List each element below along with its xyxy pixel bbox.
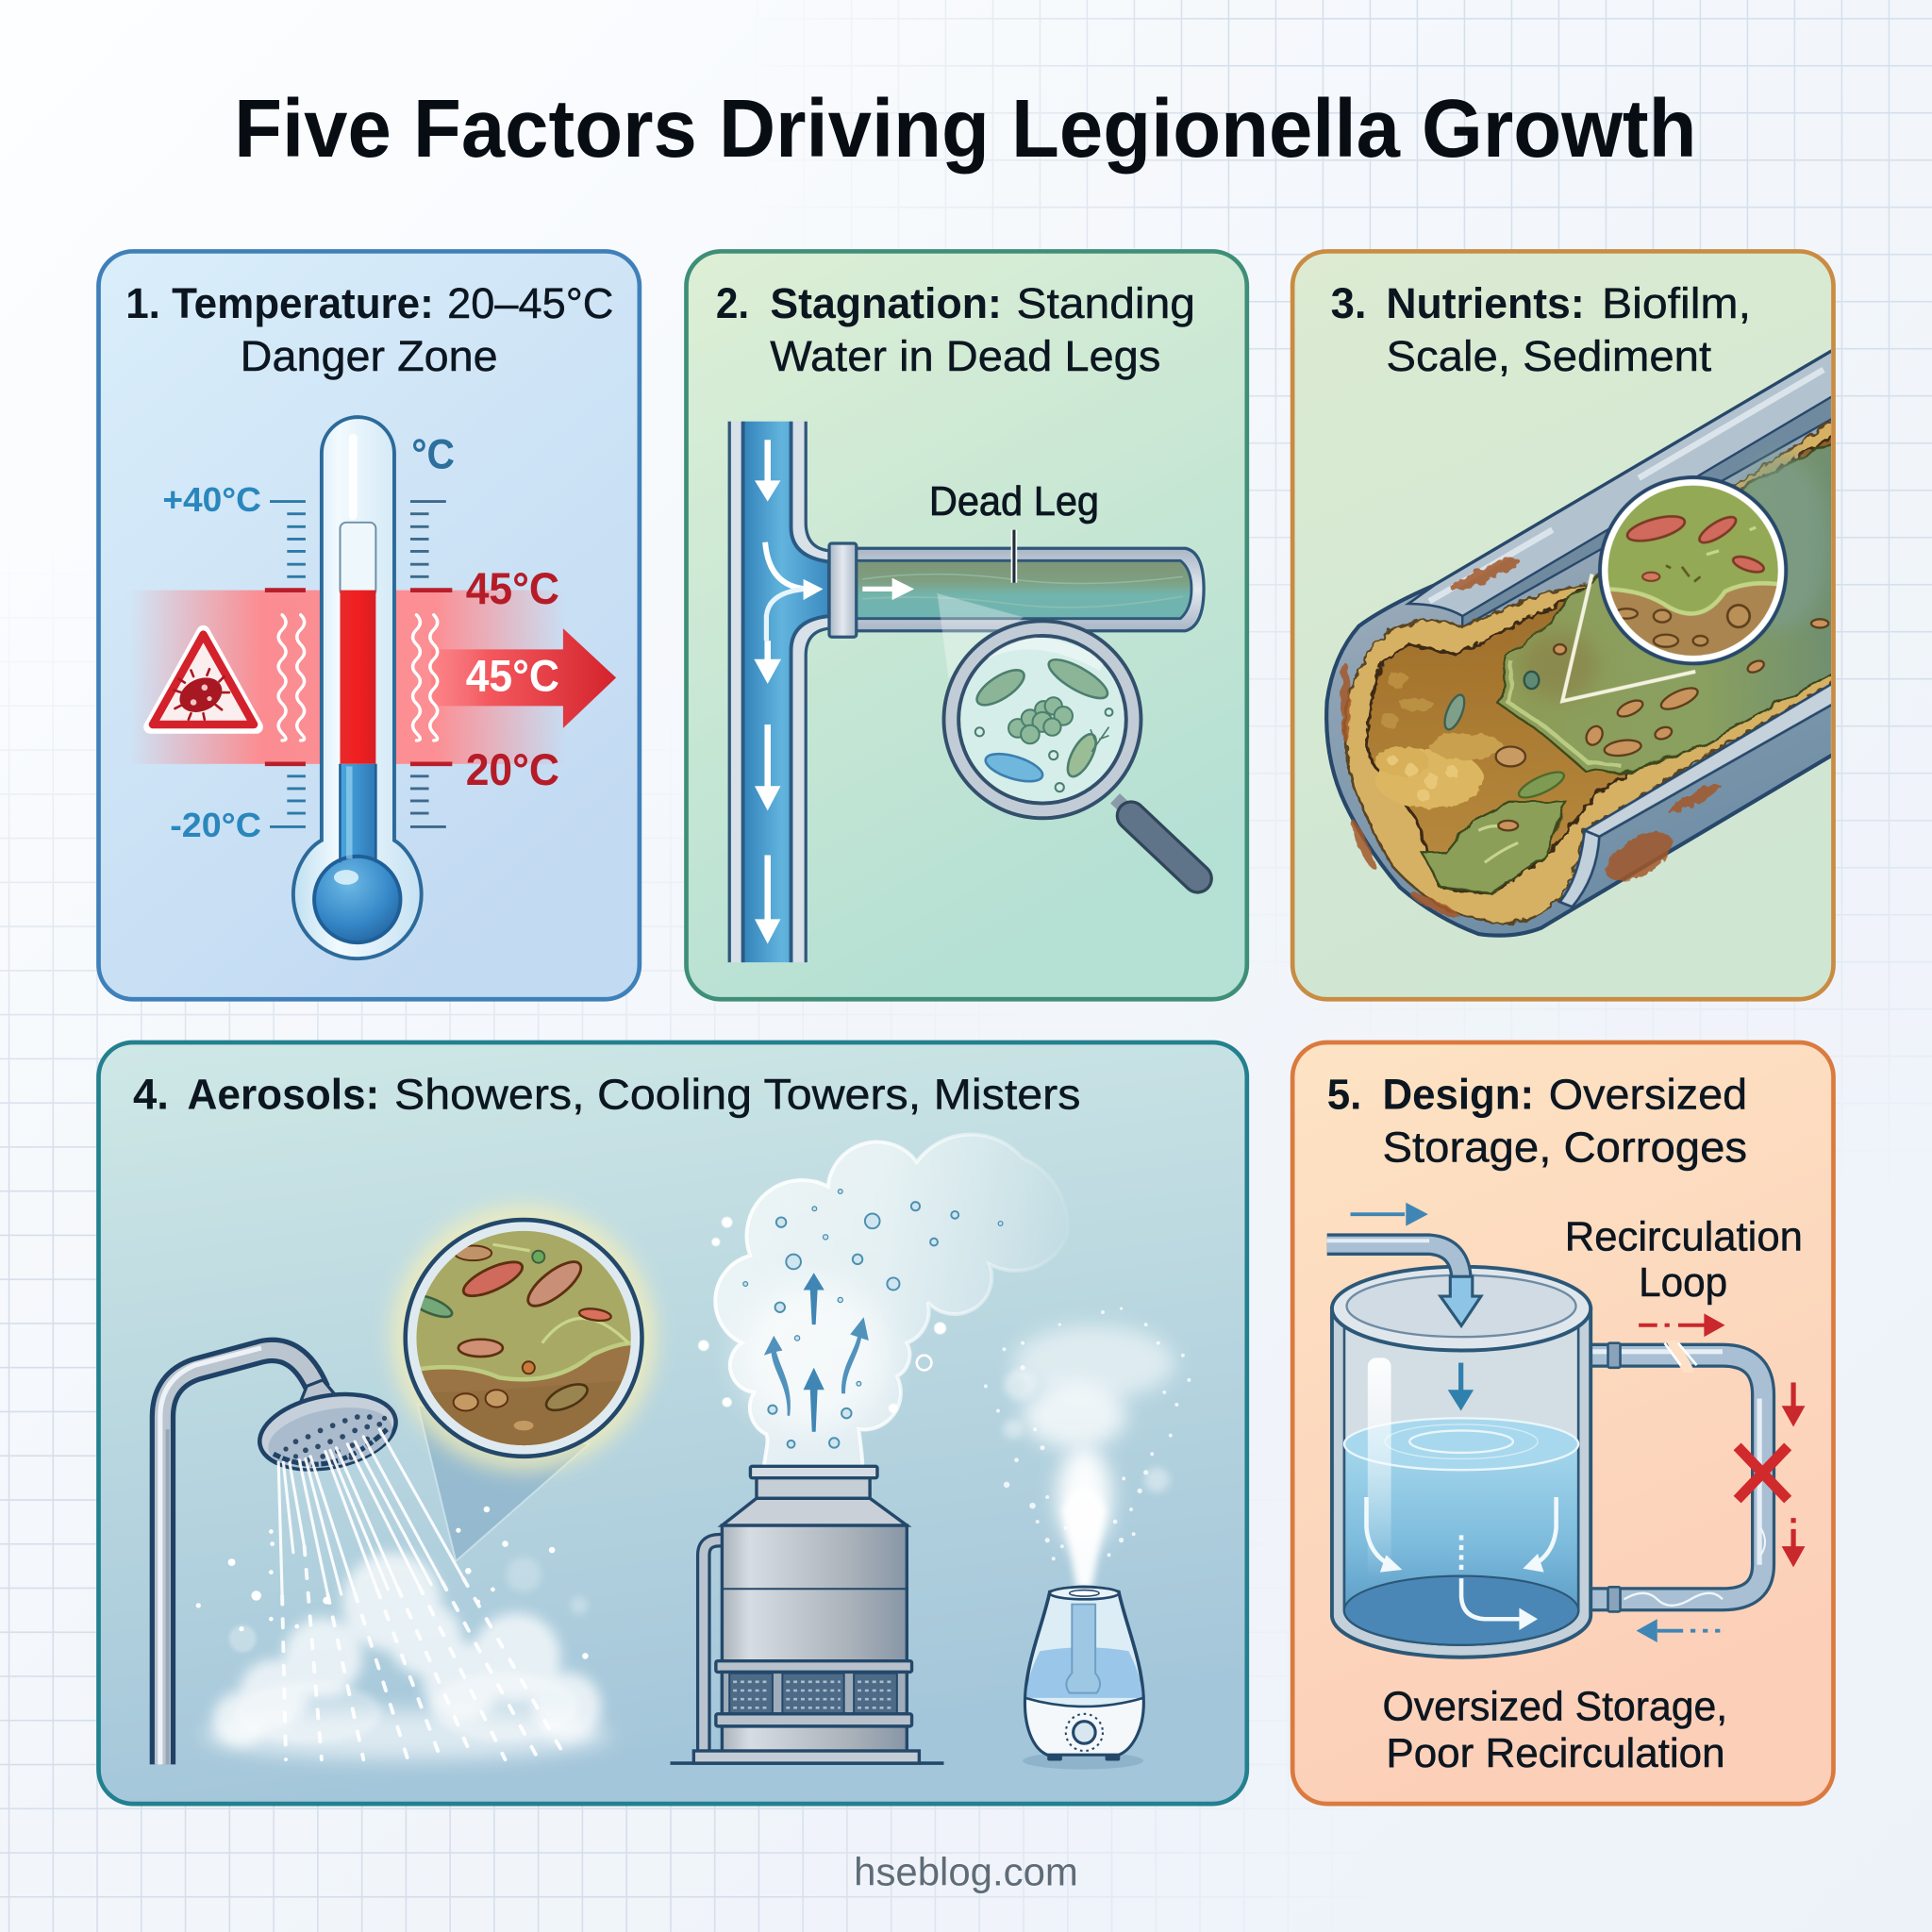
heading: stagnation: Water in Dead Legs	[770, 332, 1160, 380]
label: recirculation loop: Recirculation	[1565, 1215, 1803, 1260]
mist droplets	[196, 1507, 589, 1659]
heading: design: Design:	[1382, 1071, 1534, 1119]
tank rim	[1332, 1267, 1591, 1351]
heading: nutrients: Scale, Sediment	[1386, 332, 1712, 380]
magnifier cone lines	[1562, 575, 1695, 701]
magnifier cone	[418, 1405, 589, 1561]
humidifier	[1023, 1587, 1143, 1770]
main vertical pipe	[729, 407, 829, 979]
heading: aerosols: Aerosols:	[188, 1071, 379, 1119]
danger zone band	[129, 591, 567, 764]
pipe upper wall	[1408, 349, 1836, 627]
arrow: 45°C	[431, 628, 616, 728]
pipe shell	[1326, 349, 1836, 936]
pipe flange	[829, 543, 857, 637]
storage tank	[1332, 1267, 1591, 1657]
arrow: 45°C: 45°C	[466, 651, 559, 701]
heat wave lines	[278, 615, 438, 741]
caption: oversized storage: Oversized Storage,	[1382, 1684, 1727, 1729]
heading: temperature: Danger Zone	[241, 332, 498, 380]
magnified bacteria circle	[391, 1205, 657, 1472]
stored water	[1344, 1418, 1578, 1645]
caption: oversized storage: Poor Recirculation	[1386, 1731, 1725, 1776]
heading: stagnation: Stagnation:	[770, 279, 1002, 327]
scale labels: +40°C	[162, 480, 261, 519]
heading: design: Oversized	[1549, 1071, 1747, 1119]
flow arrows	[754, 440, 914, 943]
scale labels: 20°C	[466, 744, 559, 794]
magnified biofilm circle	[1598, 475, 1788, 665]
shower water spray	[278, 1429, 567, 1759]
blue-grey film patch	[1731, 454, 1830, 631]
scale and sediment layer	[1345, 419, 1836, 924]
heading: temperature: 20–45°C	[447, 279, 613, 327]
heading: temperature: 1. Temperature:	[125, 279, 434, 327]
magnifying glass	[943, 621, 1198, 878]
heading: aerosols	[133, 1071, 1080, 1119]
cooling tower steam plume	[715, 1135, 1068, 1466]
red flow arrows and blockage	[1637, 1313, 1805, 1642]
recirculation pipe	[1585, 1341, 1765, 1611]
water flow arrows	[1351, 1203, 1557, 1630]
steam droplets	[699, 1190, 1003, 1448]
heading: nutrients: Biofilm,	[1602, 279, 1751, 327]
illustration: corroded pipe cross-section	[1326, 349, 1836, 936]
heading: nutrients: Nutrients:	[1386, 279, 1585, 327]
gold scale mound	[1375, 673, 1503, 808]
caption: oversized storage	[1382, 1684, 1727, 1776]
heading: temperature	[125, 279, 613, 380]
icon: blocked X	[1738, 1446, 1788, 1500]
label: recirculation loop: Loop	[1639, 1260, 1727, 1306]
panel: 2 stagnation	[687, 251, 1247, 999]
bacteria in biofilm	[1441, 619, 1828, 830]
label: recirculation loop	[1565, 1215, 1803, 1306]
title: Five Factors Driving Legionella Growth	[234, 82, 1697, 175]
dead leg pipe	[850, 548, 1204, 631]
panel: 3 nutrients	[1292, 251, 1836, 999]
shower pipe and head	[160, 1348, 402, 1764]
rust stains	[1341, 553, 1724, 922]
footer: hseblog.com	[854, 1849, 1078, 1893]
panel: 4 aerosols	[98, 1042, 1247, 1804]
scale labels: °C	[411, 431, 455, 477]
magnifier cone	[938, 594, 1023, 677]
glass highlight	[1368, 1357, 1391, 1579]
heading: aerosols: 4.	[133, 1071, 169, 1119]
steam flow arrows	[764, 1273, 869, 1432]
green biofilm lower	[1422, 802, 1566, 893]
heading: aerosols: Showers, Cooling Towers, Misters	[394, 1071, 1080, 1119]
scale labels: -20°C	[170, 806, 261, 844]
heading: stagnation	[716, 279, 1195, 380]
brown cavity	[1367, 434, 1836, 893]
cooling tower	[671, 1466, 943, 1763]
heading: design: Storage, Corroges	[1382, 1124, 1747, 1172]
heading: design	[1327, 1071, 1747, 1172]
heading: stagnation: Standing	[1017, 279, 1195, 327]
scale labels	[162, 431, 559, 844]
heading: nutrients	[1331, 279, 1751, 380]
thermometer	[293, 417, 422, 958]
panel: 5 design	[1292, 1042, 1834, 1804]
panel: 1 temperature	[98, 251, 640, 999]
heading: design: 5.	[1327, 1071, 1361, 1119]
humidifier mist	[984, 1307, 1191, 1590]
thermometer scale ticks	[265, 502, 452, 826]
green biofilm upper	[1500, 441, 1836, 774]
scale labels: 45°C	[466, 563, 559, 613]
shower steam cloud	[204, 1553, 610, 1759]
inflow pipe	[1327, 1241, 1481, 1325]
heading: nutrients: 3.	[1331, 279, 1366, 327]
label: dead leg: Dead Leg	[929, 479, 1099, 525]
heading: stagnation: 2.	[716, 279, 749, 327]
icon: bacteria warning triangle	[150, 632, 257, 727]
lower wall ledge	[1585, 681, 1836, 837]
